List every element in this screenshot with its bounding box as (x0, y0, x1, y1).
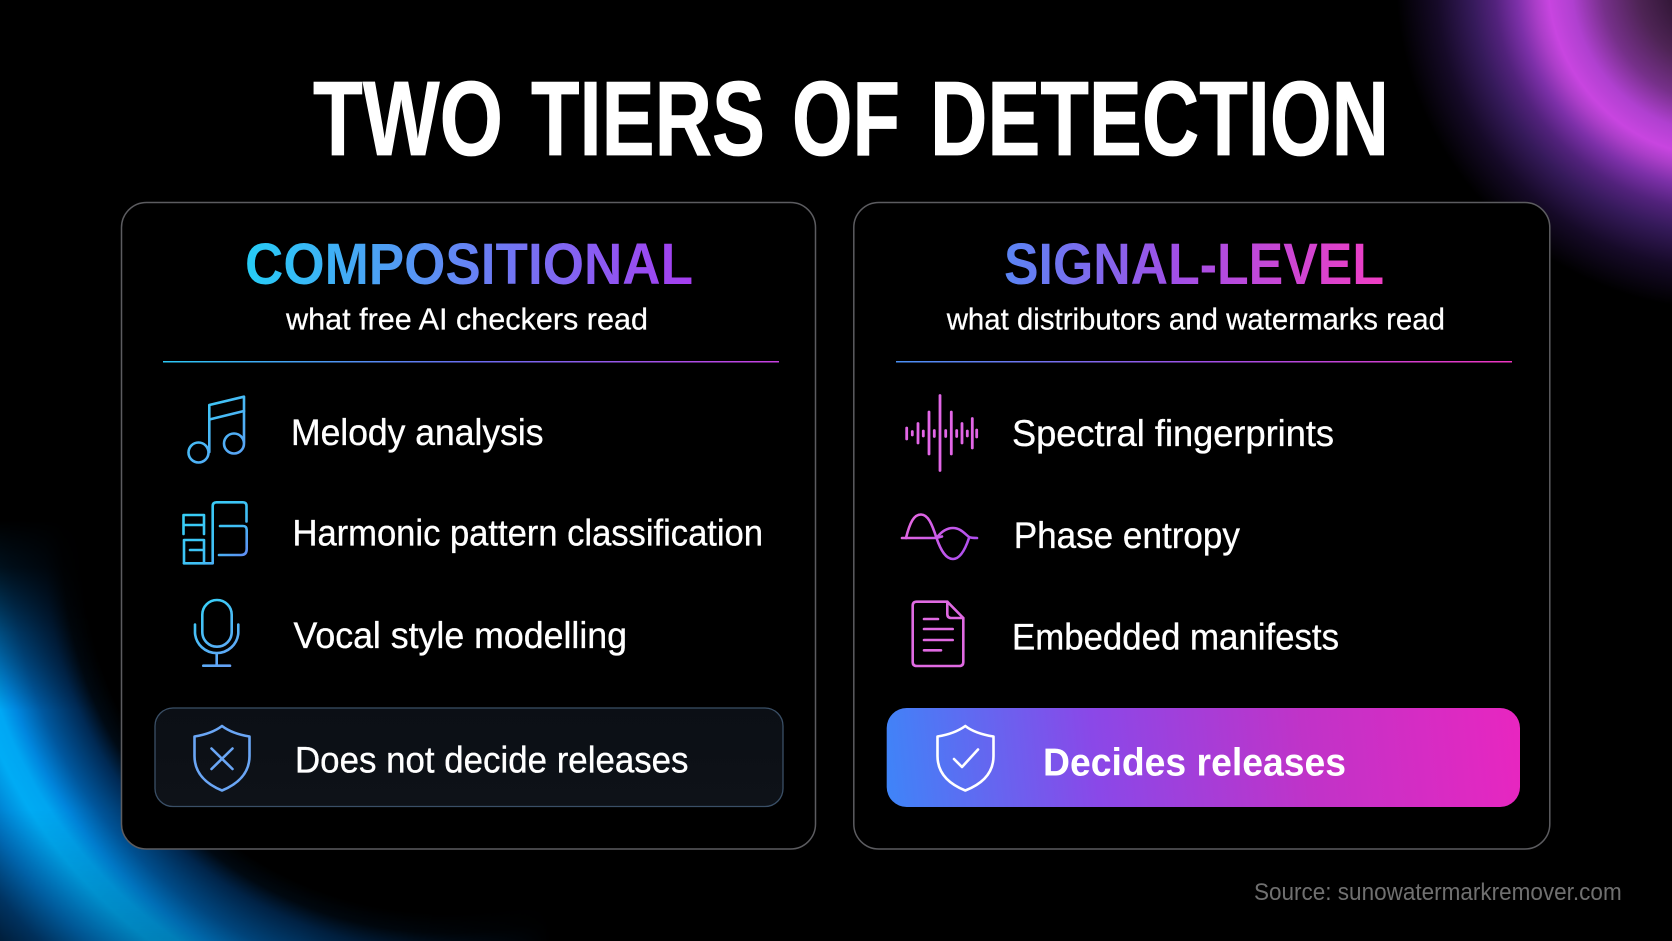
text: phase entropy: Phase entropy (1014, 515, 1240, 556)
heading: compositional: COMPOSITIONAL (245, 232, 693, 297)
panel: signal-level (854, 202, 1550, 849)
title: TWO (313, 60, 503, 178)
text: embedded manifests: Embedded manifests (1012, 617, 1339, 658)
text: vocal style modelling: Vocal style modelling (294, 615, 627, 656)
title: OF (792, 60, 900, 178)
heading: signal-level: SIGNAL-LEVEL (1004, 232, 1384, 297)
icon: document (913, 602, 963, 666)
icon: music note (188, 397, 244, 462)
source note: Source: sunowatermarkremover.com (1254, 879, 1622, 906)
icon: waveform (907, 396, 977, 470)
text: spectral fingerprints: Spectral fingerprints (1012, 413, 1334, 454)
icon: shield with x (194, 726, 250, 790)
divider (896, 361, 1512, 362)
title: TIERS (531, 60, 765, 178)
purple glow top right (1300, 0, 1672, 340)
subheading: what distributors and watermarks read: what distributors and watermarks read (946, 302, 1445, 336)
icon: microphone (195, 600, 238, 666)
text: decides releases: Decides releases (1043, 741, 1346, 784)
text: does not decide releases: Does not decide releases (295, 740, 688, 780)
title (313, 60, 1389, 178)
title: DETECTION (930, 60, 1389, 178)
divider (163, 361, 779, 362)
text: melody analysis: Melody analysis (291, 412, 544, 453)
blue glow bottom left (0, 534, 521, 941)
icon: phase wave (902, 514, 977, 559)
text: harmonic pattern classification: Harmonic pattern classification (292, 512, 763, 554)
icon: shield with check (938, 726, 994, 790)
callout: decides releases (887, 708, 1520, 807)
panel: compositional (122, 202, 816, 849)
callout: does not decide releases (155, 708, 783, 806)
icon: harmonic pattern (184, 502, 247, 563)
subheading: what free AI checkers read: what free AI checkers read (285, 302, 648, 336)
